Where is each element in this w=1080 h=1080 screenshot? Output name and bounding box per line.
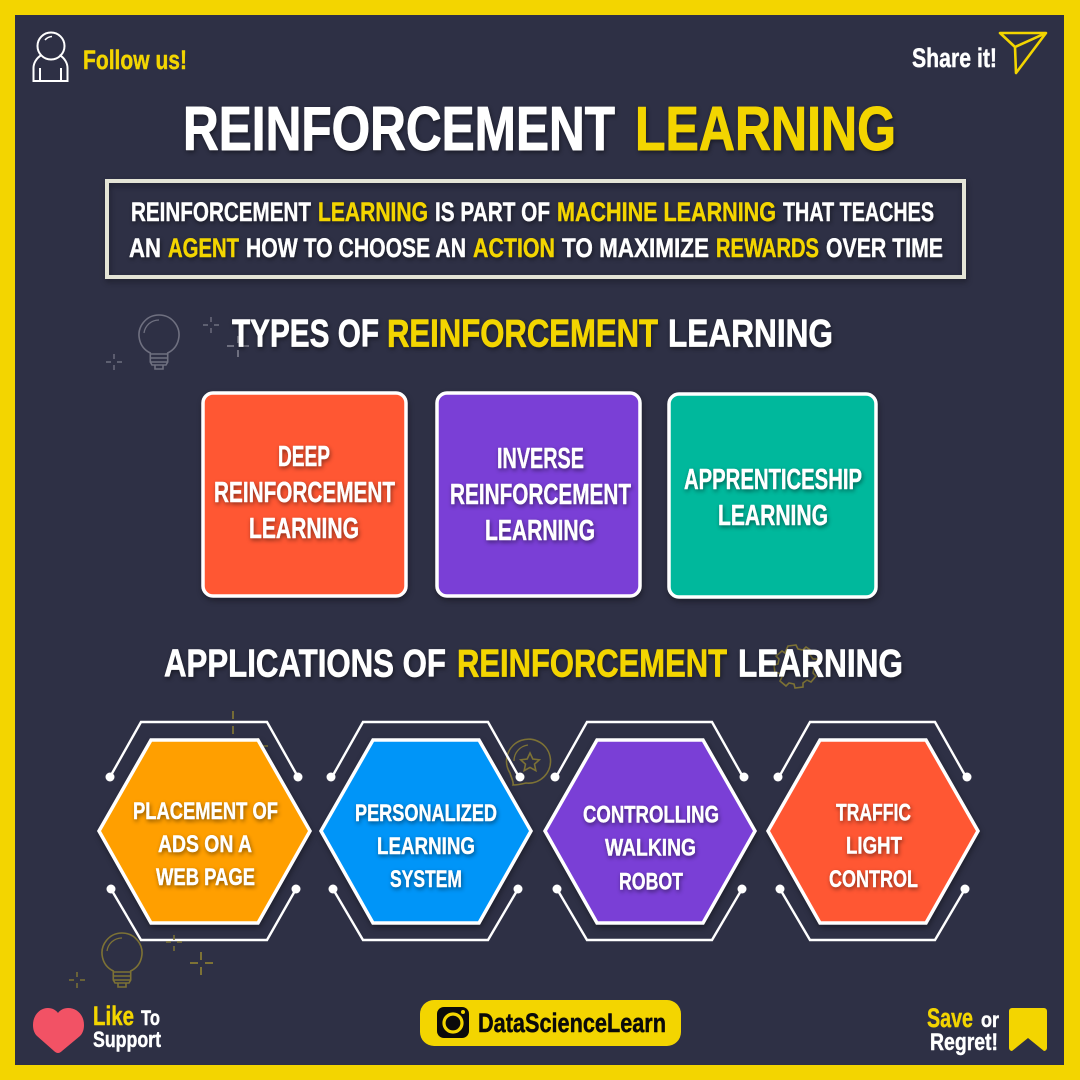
like to support label: To bbox=[141, 1007, 160, 1030]
hexagon group: personalized learning system: SYSTEM bbox=[390, 866, 462, 893]
sparkles olive bottom bbox=[69, 935, 213, 988]
heading: types bbox=[232, 312, 833, 356]
heading: applications: REINFORCEMENT bbox=[457, 642, 727, 686]
heading: types: REINFORCEMENT bbox=[387, 312, 658, 356]
instagram pill: DataScienceLearn bbox=[478, 1008, 666, 1038]
icon: light bulb olive bbox=[102, 933, 142, 987]
hexagon group: placement of ads: ADS ON A bbox=[158, 831, 252, 858]
heading: applications: APPLICATIONS OF bbox=[164, 642, 446, 686]
hexagon group: controlling walking robot: WALKING bbox=[605, 834, 696, 862]
hexagon group: traffic light control: CONTROL bbox=[829, 866, 918, 893]
card: apprenticeship learning: LEARNING bbox=[718, 500, 828, 532]
definition box: LEARNING bbox=[318, 197, 428, 227]
title: REINFORCEMENT bbox=[183, 95, 615, 164]
card: apprenticeship learning: APPRENTICESHIP bbox=[684, 464, 862, 496]
heading: applications: LEARNING bbox=[738, 642, 903, 686]
hexagon group: placement of ads bbox=[99, 722, 310, 940]
icon: paper plane bbox=[1000, 33, 1046, 73]
sparkles grey bbox=[106, 317, 249, 370]
hexagon group: controlling walking robot: CONTROLLING bbox=[583, 802, 719, 828]
card: deep reinforcement learning: LEARNING bbox=[249, 513, 359, 545]
like to support label: Like bbox=[93, 1001, 134, 1031]
card: apprenticeship learning bbox=[669, 394, 876, 597]
definition box: REWARDS bbox=[716, 233, 819, 263]
follow us label: Follow us! bbox=[83, 45, 187, 75]
definition box: IS PART OF bbox=[435, 197, 550, 227]
hexagon group: traffic light control bbox=[768, 722, 978, 940]
hexagon group: personalized learning system: LEARNING bbox=[377, 833, 475, 860]
hexagon group: controlling walking robot: ROBOT bbox=[619, 868, 683, 896]
definition box: ACTION bbox=[473, 233, 555, 263]
save or regret label bbox=[927, 1003, 999, 1056]
save or regret label: or bbox=[981, 1009, 999, 1032]
heading: applications bbox=[164, 642, 903, 686]
definition box bbox=[107, 181, 964, 277]
card: deep reinforcement learning bbox=[203, 393, 406, 596]
definition box: THAT TEACHES bbox=[783, 197, 934, 227]
card: inverse reinforcement learning bbox=[437, 393, 640, 596]
icon: star chat bubble bbox=[507, 739, 551, 785]
definition box: OVER TIME bbox=[826, 233, 943, 263]
save or regret label: Save bbox=[927, 1003, 973, 1033]
instagram pill bbox=[420, 1000, 681, 1046]
card: deep reinforcement learning: REINFORCEMENT bbox=[214, 477, 395, 509]
card: inverse reinforcement learning: REINFORCEMENT bbox=[450, 479, 631, 511]
save or regret label: Regret! bbox=[930, 1029, 998, 1056]
card: inverse reinforcement learning: LEARNING bbox=[485, 515, 595, 547]
heading: types: TYPES OF bbox=[232, 312, 379, 356]
definition box: AN bbox=[129, 233, 161, 263]
card: inverse reinforcement learning: INVERSE bbox=[497, 443, 584, 475]
icon: instagram bbox=[437, 1007, 469, 1038]
hexagon group: controlling walking robot bbox=[545, 722, 755, 940]
definition box: HOW TO CHOOSE AN bbox=[246, 233, 466, 263]
like to support label bbox=[93, 1001, 162, 1052]
hexagon group: personalized learning system: PERSONALIZED bbox=[355, 800, 497, 827]
icon: bookmark bbox=[1009, 1008, 1047, 1051]
like to support label: Support bbox=[93, 1027, 162, 1052]
hexagon group: traffic light control: LIGHT bbox=[846, 832, 902, 860]
definition box: REINFORCEMENT bbox=[131, 197, 311, 227]
hexagon group: traffic light control: TRAFFIC bbox=[836, 800, 911, 826]
icon: gear behind heading bbox=[774, 645, 818, 688]
hexagon group: personalized learning system bbox=[321, 722, 531, 940]
share it label: Share it! bbox=[912, 43, 997, 73]
icon: heart bbox=[33, 1008, 84, 1053]
hexagon group: placement of ads: PLACEMENT OF bbox=[133, 798, 278, 825]
card: deep reinforcement learning: DEEP bbox=[278, 441, 330, 473]
definition box: TO MAXIMIZE bbox=[562, 233, 709, 263]
icon: light bulb grey bbox=[139, 315, 179, 369]
definition box: AGENT bbox=[168, 233, 239, 263]
definition box: MACHINE LEARNING bbox=[557, 197, 776, 227]
title: LEARNING bbox=[635, 95, 896, 164]
icon: follow person bbox=[34, 32, 68, 81]
hexagon group: placement of ads: WEB PAGE bbox=[156, 864, 255, 891]
heading: types: LEARNING bbox=[668, 312, 833, 356]
sparkles olive top bbox=[233, 711, 268, 752]
